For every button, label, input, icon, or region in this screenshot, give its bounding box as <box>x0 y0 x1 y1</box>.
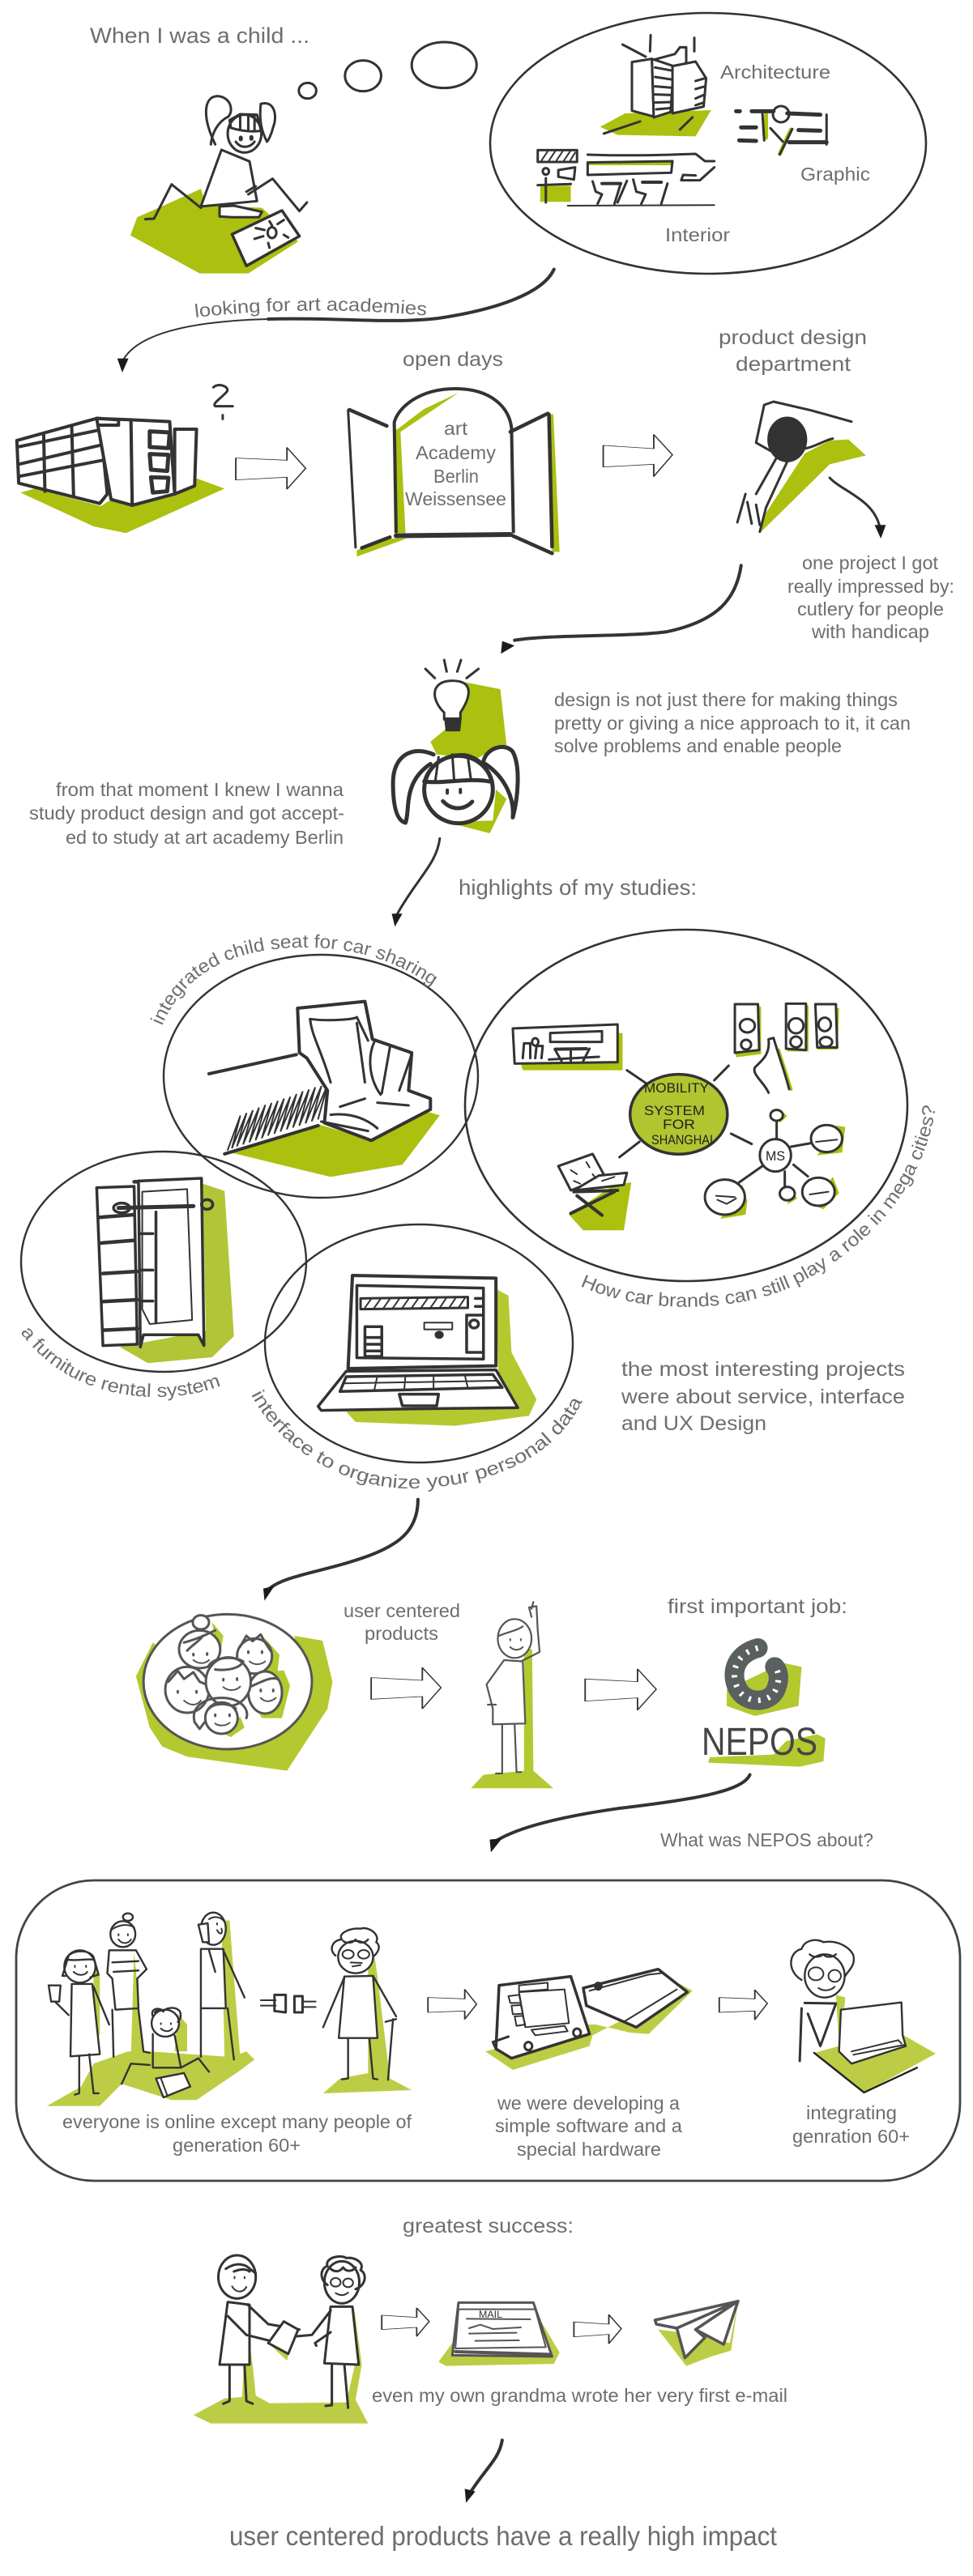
text: integrating generation: genration 60+ <box>792 2126 910 2147</box>
icon: unplugged cable <box>261 1995 316 2012</box>
text: we were developing: simple software and a <box>495 2115 682 2136</box>
arrow: to open days <box>236 448 305 489</box>
text: design is not just: solve problems and enable people <box>554 735 842 756</box>
arrow: to integrating <box>719 1990 767 2020</box>
arrow: to users <box>263 1500 418 1601</box>
arrow: to person <box>371 1667 441 1709</box>
icon: architecture building <box>600 35 711 136</box>
panel: mobility system project <box>463 928 935 1307</box>
arrow: to what was nepos <box>489 1775 750 1852</box>
text: art academy berlin weissensee: Weissensee <box>405 488 506 509</box>
icon: open door <box>348 389 560 556</box>
icon: girl with light bulb <box>393 660 518 833</box>
sketched text: mobility system for shanghai: MOBILITY <box>644 1080 709 1096</box>
curved text: looking for art academies: looking for art academies <box>194 298 426 317</box>
text: art academy berlin weissensee: Academy <box>416 442 497 463</box>
icon: grandma using tablet <box>791 1940 936 2093</box>
icon: handicap cutlery <box>737 402 866 533</box>
text: everyone is online <box>62 2111 412 2156</box>
text: one project: cutlery for people <box>797 598 944 620</box>
text: integrating generation: integrating <box>806 2102 897 2123</box>
heading: when I was a child: When I was a child ... <box>90 23 309 48</box>
text: integrating generation <box>792 2102 910 2147</box>
heading: product design department: department <box>736 353 851 376</box>
text: design is not just: design is not just there for making things <box>554 689 898 710</box>
icon: thought bubbles <box>299 42 476 99</box>
conclusion: user centered products: user centered products have a really high impact <box>229 2521 777 2551</box>
arrow: to cutlery note <box>830 478 886 539</box>
sketched text: mobility system for shanghai: SYSTEM <box>644 1103 705 1118</box>
heading: first important job: first important job: <box>668 1595 847 1618</box>
panel: thought circle with design disciplines <box>490 13 926 274</box>
arrow: to paper plane <box>574 2314 621 2344</box>
arrow: to first job <box>585 1669 656 1710</box>
thought circle outline <box>490 13 926 274</box>
arrow: to highlights <box>392 838 440 926</box>
icon: art academy building with question mark <box>17 385 233 533</box>
icon: wardrobe <box>96 1178 234 1363</box>
heading: open days: open days <box>403 348 503 371</box>
curved text: car brands: How car brands can still play a role in mega cities? <box>582 1105 935 1307</box>
icon: mobility mind map <box>513 1003 845 1230</box>
arrow: to light bulb <box>501 565 741 654</box>
text: one project: one project I got <box>802 552 939 573</box>
circle: child seat <box>164 955 478 1198</box>
panel: furniture rental <box>19 1150 308 1401</box>
curved text: furniture rental: a furniture rental system <box>21 1328 220 1401</box>
icon: child seat <box>209 1002 440 1177</box>
heading: highlights of my studies: highlights of my studies: <box>459 875 697 900</box>
curved text: child seat: integrated child seat for car sharing <box>150 935 437 1025</box>
text: we were developing: special hardware <box>517 2139 661 2160</box>
icon: nepos logo <box>708 1648 826 1767</box>
sketched text: mobility system for shanghai: SHANGHAI <box>651 1132 713 1147</box>
text: most interesting projects: and UX Design <box>621 1412 766 1435</box>
arrow: to mail <box>382 2308 429 2336</box>
text: most interesting projects: were about service, interface <box>621 1386 905 1408</box>
heading: greatest success: greatest success: <box>403 2215 574 2238</box>
text: user centered products: user centered <box>344 1600 460 1621</box>
panel: what was nepos about <box>16 1880 960 2181</box>
icon: typography sketch <box>736 106 826 155</box>
text: art academy berlin weissensee: Berlin <box>433 466 479 487</box>
sketched text: mobility system for shanghai <box>644 1080 785 1164</box>
text: art academy berlin weissensee <box>405 418 506 509</box>
text: design is not just: pretty or giving a nice approach to it, it can <box>554 713 911 734</box>
text: we were developing: we were developing a <box>497 2093 680 2114</box>
icon: laptop <box>318 1275 536 1426</box>
text: art academy berlin weissensee: art <box>444 418 468 439</box>
text: from that moment <box>29 779 344 848</box>
sketched text: mobility system for shanghai: MS <box>766 1148 785 1164</box>
text: everyone is online: generation 60+ <box>173 2135 301 2156</box>
label: architecture: Architecture <box>720 62 830 83</box>
panel: personal data interface <box>251 1223 583 1492</box>
text: most interesting projects <box>621 1358 905 1435</box>
circle: interface <box>265 1224 573 1463</box>
sketched text: mail: MAIL <box>479 2309 502 2320</box>
text: what was nepos about: What was NEPOS about? <box>660 1829 873 1850</box>
circle: mobility <box>465 930 907 1281</box>
curved text: interface: interface to organize your personal data <box>251 1390 583 1492</box>
icon: handshake with tablet <box>194 2255 368 2424</box>
text: one project: really impressed by: <box>787 576 954 597</box>
text: most interesting projects: the most interesting projects <box>621 1358 905 1381</box>
icon: interior room <box>538 150 715 206</box>
label: interior: Interior <box>665 224 730 245</box>
text: user centered products <box>344 1600 460 1644</box>
icon: paper plane <box>655 2301 738 2366</box>
circle: furniture <box>21 1152 306 1372</box>
text: from that moment: study product design and got accept- <box>29 803 344 824</box>
heading: product design department: product design <box>719 326 867 349</box>
icon: person raising finger <box>471 1602 553 1788</box>
arrow: looking for art academies <box>117 270 554 373</box>
text: user centered products: products <box>365 1623 438 1644</box>
panel: child seat project <box>150 935 480 1199</box>
text: from that moment: ed to study at art academy Berlin <box>66 827 344 848</box>
heading: product design department <box>719 326 867 376</box>
text: grandma first e-mail: even my own grandma wrote her very first e-mail <box>372 2385 787 2406</box>
text: everyone is online: everyone is online except many people of <box>62 2111 412 2132</box>
text: we were developing <box>495 2093 682 2160</box>
arrow: to software <box>428 1990 476 2019</box>
label: graphic: Graphic <box>800 164 870 185</box>
icon: online family <box>47 1913 254 2106</box>
icon: girl drawing <box>130 96 307 274</box>
icon: nepos tablet hardware <box>485 1969 693 2070</box>
text: one project <box>787 552 954 642</box>
icon: group of user faces <box>136 1614 332 1771</box>
sketched logo text: nepos: NEPOS <box>702 1721 817 1764</box>
arrow: to product design <box>604 435 672 476</box>
arrow: to conclusion <box>465 2440 502 2503</box>
panel outline <box>16 1880 960 2181</box>
text: one project: with handicap <box>811 621 929 642</box>
icon: grandma with cane <box>323 1928 412 2093</box>
icon: email tablet <box>438 2302 560 2366</box>
sketched text: mobility system for shanghai: FOR <box>663 1117 695 1132</box>
text: from that moment: from that moment I knew I wanna <box>56 779 344 800</box>
text: design is not just <box>554 689 911 756</box>
